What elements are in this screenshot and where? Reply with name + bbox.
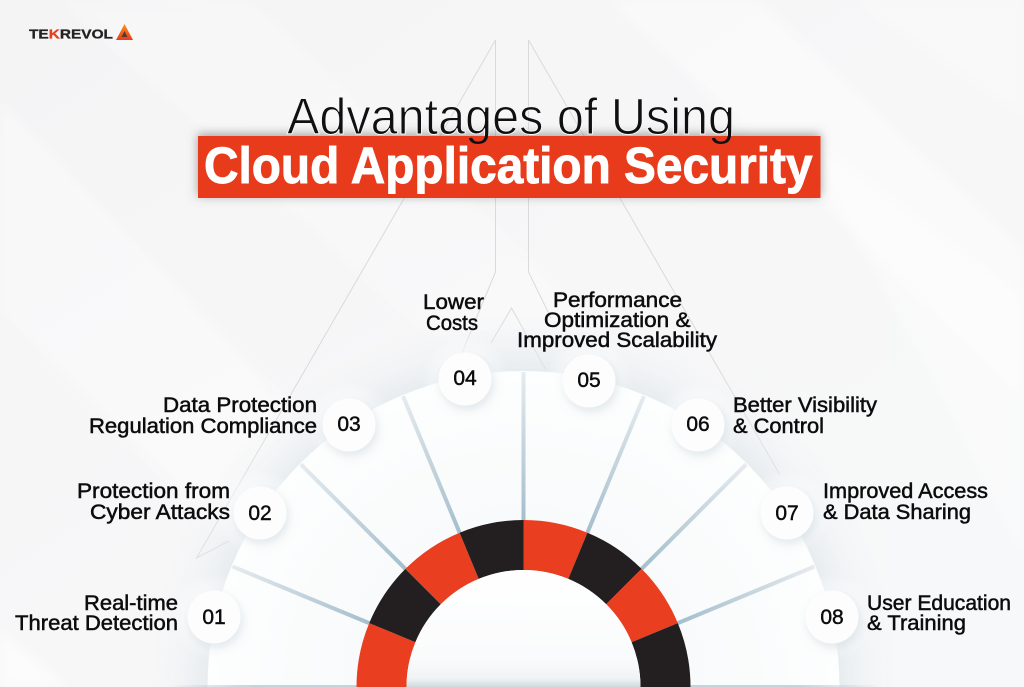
number 01: 01 xyxy=(202,606,226,629)
number 06: 06 xyxy=(686,413,710,436)
logo xyxy=(29,24,133,42)
badge 03 xyxy=(322,398,376,452)
item 07 xyxy=(743,469,988,557)
central ring xyxy=(356,520,690,687)
item 08 xyxy=(788,573,1011,661)
label 02 xyxy=(77,480,230,524)
label 01 xyxy=(15,592,178,635)
label 05: Optimization & xyxy=(544,309,690,332)
number 08: 08 xyxy=(820,606,844,629)
label 07 xyxy=(823,480,988,524)
badge 01 xyxy=(188,590,240,644)
badge 07 xyxy=(760,486,814,540)
label 07: & Data Sharing xyxy=(823,501,971,524)
badge 04 xyxy=(438,352,492,406)
label 01: Threat Detection xyxy=(15,612,178,635)
number 05: 05 xyxy=(577,369,601,392)
label 04: Lower xyxy=(423,291,484,314)
label 04 xyxy=(423,291,484,335)
item 06 xyxy=(654,381,878,469)
item 05 xyxy=(517,289,718,425)
label 02: Cyber Attacks xyxy=(90,501,230,524)
badge 02 xyxy=(234,486,286,540)
title banner xyxy=(198,136,820,198)
label 06 xyxy=(733,394,878,438)
label 02: Protection from xyxy=(77,480,230,503)
label 03: Data Protection xyxy=(163,394,317,417)
label 05: Improved Scalability xyxy=(517,329,718,352)
item 01 xyxy=(15,573,258,661)
number 04: 04 xyxy=(453,367,477,390)
title: Advantages of Using xyxy=(287,88,735,145)
item 03 xyxy=(89,381,393,469)
background triangle lines xyxy=(196,40,780,558)
label 05: Performance xyxy=(553,289,682,312)
base line xyxy=(170,685,880,687)
label 08 xyxy=(867,592,1011,635)
fan halo xyxy=(148,312,898,687)
badge 08 xyxy=(806,590,858,644)
spokes xyxy=(232,372,814,623)
icon: logo triangle xyxy=(116,24,133,40)
label 06: & Control xyxy=(733,415,824,438)
badge 06 xyxy=(672,398,724,452)
fan panel xyxy=(208,371,840,687)
item 04 xyxy=(421,291,509,423)
number 02: 02 xyxy=(248,502,272,525)
inner semicircle xyxy=(406,570,640,687)
label 06: Better Visibility xyxy=(733,394,878,417)
item 02 xyxy=(77,469,304,557)
label 05 xyxy=(517,289,718,352)
number 03: 03 xyxy=(337,413,361,436)
badge 05 xyxy=(562,354,616,408)
label 03: Regulation Compliance xyxy=(89,415,317,438)
number 07: 07 xyxy=(775,502,799,525)
logo: TEKREVOL xyxy=(29,26,113,42)
label 08: User Education xyxy=(867,592,1011,615)
label 07: Improved Access xyxy=(823,480,988,503)
label 04: Costs xyxy=(426,312,478,335)
label 03 xyxy=(89,394,317,438)
banner heading: Cloud Application Security xyxy=(204,137,813,194)
label 01: Real-time xyxy=(84,592,178,615)
label 08: & Training xyxy=(867,612,966,635)
